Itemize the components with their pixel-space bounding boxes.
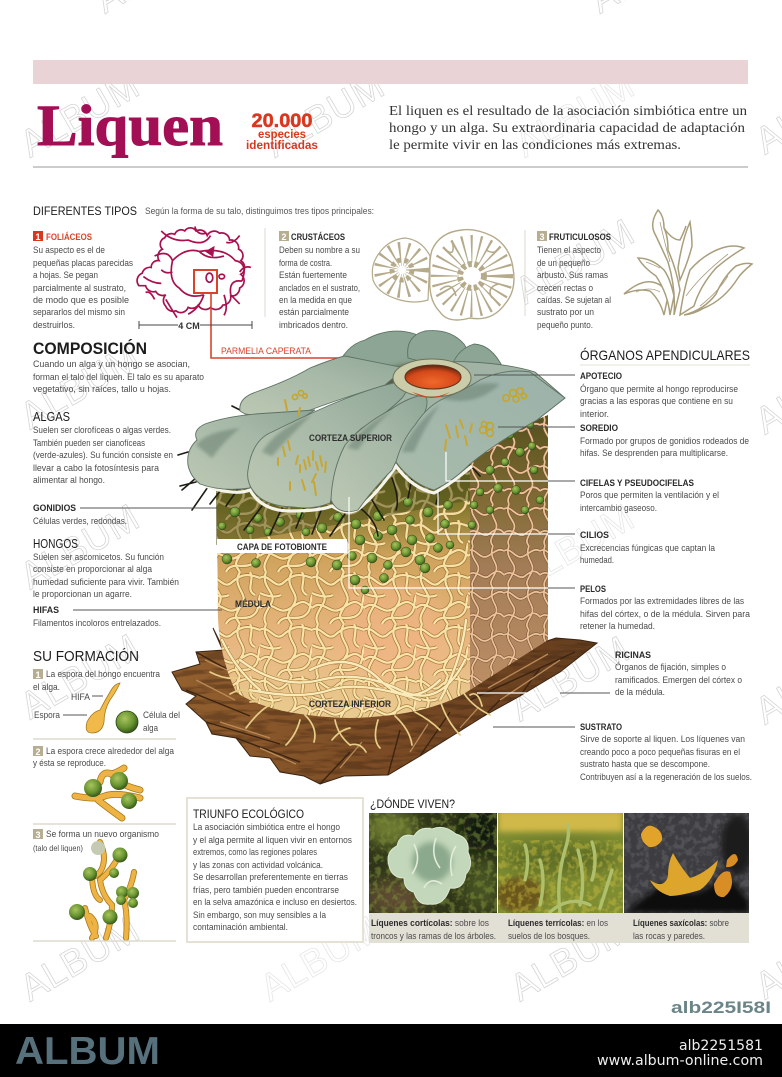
text: hifas: Filamentos incoloros entrelazados. <box>33 618 161 629</box>
scale bar <box>139 321 252 331</box>
text: cifelas: intercambio gaseoso. <box>580 503 657 514</box>
panel: triunfo ecologico: TRIUNFO ECOLÓGICO <box>193 806 304 821</box>
heading: organos apendiculares: ÓRGANOS APENDICULARES <box>580 347 750 363</box>
text: algas: ALGAS <box>33 409 70 424</box>
text: apotecio: gracias a las esporas que contiene en su <box>580 396 733 407</box>
text: algas: alimentar al hongo. <box>33 475 105 486</box>
text: pelos: PELOS <box>580 584 606 594</box>
text: ricinas: Órganos de fijación, simples o <box>615 662 726 673</box>
panel: triunfo ecologico <box>187 798 363 942</box>
caption: terricolas: suelos de los bosques. <box>508 931 590 942</box>
captions band <box>369 913 749 943</box>
intro text <box>389 104 747 153</box>
heading: su formacion: SU FORMACIÓN <box>33 648 139 665</box>
type 3: fruticulosos text: crecen rectas o <box>537 283 593 294</box>
text: gonidios: GONIDIOS <box>33 503 76 513</box>
step 1 text: 1 <box>36 670 41 680</box>
step 2 text: La espora crece alrededor del alga <box>46 746 175 757</box>
type 3: fruticulosos text: 3 <box>540 232 545 242</box>
type 2: crustaceos text: Deben su nombre a su <box>279 245 360 256</box>
type 2: crustaceos text: imbricados dentro. <box>279 320 348 331</box>
panel: triunfo ecologico: y el alga permite al liquen vivir en entornos <box>193 835 352 846</box>
illustration: back lobes <box>335 331 503 385</box>
text: algas: (verde-azules). Su función consiste en <box>33 450 173 461</box>
panel: triunfo ecologico: extremos, como las regiones polares <box>193 847 317 858</box>
type 1: foliaceos text: parcialmente al sustrato, <box>33 283 126 294</box>
type 3: fruticulosos text: sustrato por un <box>537 307 594 318</box>
watermarks: ALBUM <box>254 908 387 1010</box>
section heading: diferentes tipos: DIFERENTES TIPOS <box>33 204 137 218</box>
type 1: foliaceos text: FOLIÁCEOS <box>46 231 92 243</box>
header band <box>33 60 748 84</box>
text: hongos: Suelen ser ascomicetos. Su función <box>33 552 164 563</box>
text: sustrato: Sirve de soporte al liquen. Los líquenes van <box>580 734 745 745</box>
text: hifas: HIFAS <box>33 605 59 615</box>
step 2 text: 2 <box>36 747 41 757</box>
heading: donde viven: ¿DÓNDE VIVEN? <box>370 796 455 811</box>
watermarks: ALBUM <box>14 496 147 598</box>
text: pelos: hifas del córtex, o de la médula. Sirven para <box>580 609 751 620</box>
photo: corticolous lichen <box>369 813 497 913</box>
text: apotecio: APOTECIO <box>580 371 622 381</box>
type 1: foliaceos text: 1 <box>36 232 41 242</box>
step 1 illustration: spore: HIFA <box>71 691 91 702</box>
text: pelos: retener la humedad. <box>580 621 655 632</box>
footer bar: alb2251581 <box>679 1038 763 1054</box>
watermarks: ALBUM <box>14 64 147 166</box>
text: soredio: hifas. Se desprenden para multiplicarse. <box>580 448 728 459</box>
watermarks: ALBUM <box>504 908 637 1010</box>
section heading: diferentes tipos <box>33 204 374 218</box>
type 1: foliaceos text: pequeñas placas parecidas <box>33 258 133 269</box>
watermarks: ALBUM <box>258 64 392 166</box>
species count: identificadas <box>246 140 318 152</box>
type 2: crustaceos text: forma de costra. <box>279 258 332 269</box>
text: soredio: SOREDIO <box>580 423 618 433</box>
caption: corticolas: Líquenes cortícolas: sobre los <box>371 917 489 928</box>
title: Liquen <box>37 93 223 158</box>
watermarks: ALBUM <box>508 211 642 313</box>
text: composicion: Cuando un alga y un hongo se asocian, <box>33 359 190 370</box>
label: medula: MÉDULA <box>235 598 271 609</box>
type 3: fruticulosos text <box>537 231 611 331</box>
text: apotecio: Órgano que permite al hongo reproducirse <box>580 384 738 395</box>
type 2: crustaceos text <box>279 231 360 331</box>
illustration: leader lines <box>73 375 610 727</box>
watermarks: ALBUM <box>504 628 637 730</box>
panel: triunfo ecologico: Sin embargo, son muy sensibles a la <box>193 910 327 921</box>
illustration: white lower edge of thallus <box>205 466 472 512</box>
text: cilios <box>580 530 716 566</box>
type 2: crustaceos text: están parcialmente <box>279 307 349 318</box>
text: hifas <box>33 605 161 629</box>
watermarks: ALBUM <box>14 908 147 1010</box>
text: composicion <box>33 359 204 395</box>
reference id: alb225I58I <box>671 998 771 1017</box>
illustration: soredia <box>292 388 527 436</box>
intro text: El liquen es el resultado de la asociación simbiótica entre un <box>389 104 747 119</box>
species count: especies <box>258 129 306 141</box>
illustration: bark substrate <box>170 626 600 786</box>
illustration: apothecium <box>393 359 471 398</box>
species count: 20.000 <box>252 111 312 132</box>
type 1: foliaceos text: Su aspecto es el de <box>33 245 105 256</box>
type 1: foliaceos text: separarlos del mismo sin <box>33 307 125 318</box>
step 3 text: Se forma un nuevo organismo <box>46 829 159 840</box>
illustration: bottom cortex hyphae <box>222 620 466 700</box>
text: composicion: forman el talo del liquen. El talo es su aparato <box>33 372 204 383</box>
text: algas: También pueden ser cianofíceas <box>33 438 145 449</box>
type 1: foliaceos text <box>33 231 133 331</box>
text: composicion: vegetativo, sin raíces, tallo u hojas. <box>33 384 171 395</box>
section heading: diferentes tipos: Según la forma de su talo, distinguimos tres tipos principales: <box>145 205 374 216</box>
caption: corticolas: troncos y las ramas de los árboles. <box>371 931 496 942</box>
panel: triunfo ecologico: y las zonas con actividad volcánica. <box>193 860 323 871</box>
text: algas: Suelen ser clorofíceas o algas verdes. <box>33 425 171 436</box>
text: pelos: Formados por las extremidades libres de las <box>580 596 744 607</box>
footer bar: www.album-online.com <box>597 1053 763 1069</box>
step 3 text: (talo del liquen) <box>33 844 83 853</box>
step 3 text: 3 <box>36 830 41 840</box>
step 1 text <box>33 669 161 693</box>
panel: su formacion <box>33 648 180 941</box>
intro text: le permite vivir en las condiciones más extremas. <box>389 138 681 153</box>
step 2 illustration <box>75 768 140 818</box>
text: hongos: consiste en proporcionar al alga <box>33 564 153 575</box>
text: sustrato: creando poco a poco pequeñas fisuras en el <box>580 747 740 758</box>
icon: zoom marker and pointer <box>194 270 345 358</box>
type 3: fruticulosos text: de un pequeño <box>537 258 590 269</box>
text: ricinas: RICINAS <box>615 650 651 660</box>
panel: triunfo ecologico: frías, pero también pueden encontrarse <box>193 885 339 896</box>
text: hongos: HONGOS <box>33 536 78 551</box>
text: soredio: Formado por grupos de gonidios rodeados de <box>580 436 749 447</box>
step 2 text: y ésta se reproduce. <box>33 758 106 769</box>
text: cifelas: Poros que permiten la ventilación y el <box>580 490 719 501</box>
step 2 text <box>33 746 175 769</box>
illustration: lobe shading <box>196 383 500 458</box>
panel: triunfo ecologico: contaminación ambiental. <box>193 922 288 933</box>
illustration: thallus lobes <box>188 356 565 512</box>
text: soredio <box>580 423 749 459</box>
footer bar: ALBUM <box>15 1030 160 1073</box>
illustration: lower rhizines <box>210 672 490 752</box>
text: pelos <box>580 584 751 632</box>
illustration: side face of block <box>467 415 548 690</box>
caption: saxicolas: las rocas y paredes. <box>633 931 705 942</box>
illustration: lichen cross-section block <box>73 331 610 786</box>
text: sustrato <box>580 722 752 783</box>
caption: terricolas <box>508 917 608 942</box>
text: hongos: humedad suficiente para vivir. También <box>33 577 179 588</box>
type 2: crustaceos text: en la medida en que <box>279 295 352 306</box>
text: ricinas <box>615 650 742 698</box>
type 1: foliaceos text: destruirlos. <box>33 320 75 331</box>
step 3 text <box>33 829 159 853</box>
text: apotecio <box>580 371 738 420</box>
label: capa de fotobionte: CAPA DE FOTOBIONTE <box>237 542 327 552</box>
step 1 illustration: alga cell <box>116 710 180 734</box>
step 1 text: La espora del hongo encuentra <box>46 669 161 680</box>
caption: saxicolas <box>633 917 729 942</box>
icon: foliose thallus <box>137 226 251 318</box>
illustration: cyphellae <box>278 400 472 495</box>
caption: terricolas: Líquenes terrícolas: en los <box>508 917 608 928</box>
panel: triunfo ecologico: La asociación simbiótica entre el hongo <box>193 822 340 833</box>
step 1 illustration: spore <box>34 683 120 733</box>
text: apotecio: interior. <box>580 409 609 420</box>
type 3: fruticulosos text: Tienen el aspecto <box>537 245 601 256</box>
text: cilios: Excrecencias fúngicas que captan la <box>580 543 716 554</box>
type 1: foliaceos text: de modo que es posible <box>33 295 129 306</box>
photo: terricolous lichen <box>496 810 623 913</box>
type 2: crustaceos text: anclados en el sustrato, <box>279 283 360 294</box>
footer bar <box>0 1024 782 1077</box>
illustration: front face (medulla) <box>216 440 470 718</box>
step 1 text: el alga. <box>33 682 60 693</box>
text: ricinas: de la médula. <box>615 687 665 698</box>
type 3: fruticulosos text: caídas. Se sujetan al <box>537 295 611 306</box>
type 1: foliaceos text: a hojas. Se pegan <box>33 270 98 281</box>
step 1 illustration: alga cell: Célula del <box>143 710 180 721</box>
icon: crustose thallus <box>372 230 514 320</box>
watermarks: ALBUM <box>14 626 147 728</box>
label: corteza inferior: CORTEZA INFERIOR <box>309 699 391 709</box>
panel: triunfo ecologico: en la selva amazónica e incluso en desiertos. <box>193 897 357 908</box>
text: cifelas: CIFELAS Y PSEUDOCIFELAS <box>580 478 694 488</box>
panel: triunfo ecologico: Se desarrollan preferentemente en tierras <box>193 872 348 883</box>
species label: PARMELIA CAPERATA <box>221 346 312 357</box>
text: algas: llevar a cabo la fotosíntesis para <box>33 463 160 474</box>
illustration: black cilia <box>178 406 480 536</box>
type 3: fruticulosos text: arbusto. Sus ramas <box>537 270 608 281</box>
text: hongos <box>33 536 179 600</box>
species count <box>246 111 318 152</box>
caption: corticolas <box>371 917 496 942</box>
text: algas <box>33 409 173 486</box>
text: cilios: CILIOS <box>580 530 609 540</box>
scale bar: 4 CM <box>178 321 200 331</box>
type 2: crustaceos text: Están fuertemente <box>279 270 347 281</box>
text: gonidios <box>33 503 127 527</box>
heading: composicion: COMPOSICIÓN <box>33 339 147 358</box>
step 1 illustration: spore: Espora <box>34 710 61 721</box>
text: hongos: le proporcionan un agarre. <box>33 589 132 600</box>
watermarks: ALBUM <box>14 336 147 438</box>
text: gonidios: Células verdes, redondas. <box>33 516 127 527</box>
watermarks: ALBUM <box>508 64 642 166</box>
caption: saxicolas: Líquenes saxícolas: sobre <box>633 917 729 928</box>
photo: saxicolous lichen <box>624 813 753 913</box>
type 3: fruticulosos text: FRUTICULOSOS <box>549 232 611 243</box>
label: corteza superior: CORTEZA SUPERIOR <box>309 433 392 443</box>
intro text: hongo y un alga. Su extraordinaria capacidad de adaptación <box>389 121 745 136</box>
step 1 illustration: alga cell: alga <box>143 723 159 734</box>
text: sustrato: sustrato hasta que se descompone. <box>580 759 710 770</box>
icon: fruticose thallus <box>624 210 752 315</box>
type 2: crustaceos text: CRUSTÁCEOS <box>291 231 345 243</box>
text: cilios: humedad. <box>580 555 614 566</box>
label: capa de fotobionte <box>217 539 347 553</box>
text: cifelas <box>580 478 719 514</box>
type 3: fruticulosos text: pequeño punto. <box>537 320 593 331</box>
text: sustrato: Contribuyen así a la regeneración de los suelos. <box>580 772 752 783</box>
illustration: algae green cells <box>218 421 544 594</box>
text: sustrato: SUSTRATO <box>580 722 622 732</box>
type 2: crustaceos text: 2 <box>282 232 287 242</box>
text: ricinas: ramificados. Emergen del córtex o <box>615 675 742 686</box>
watermarks: ALBUM <box>508 496 642 598</box>
step 3 illustration <box>69 841 139 938</box>
